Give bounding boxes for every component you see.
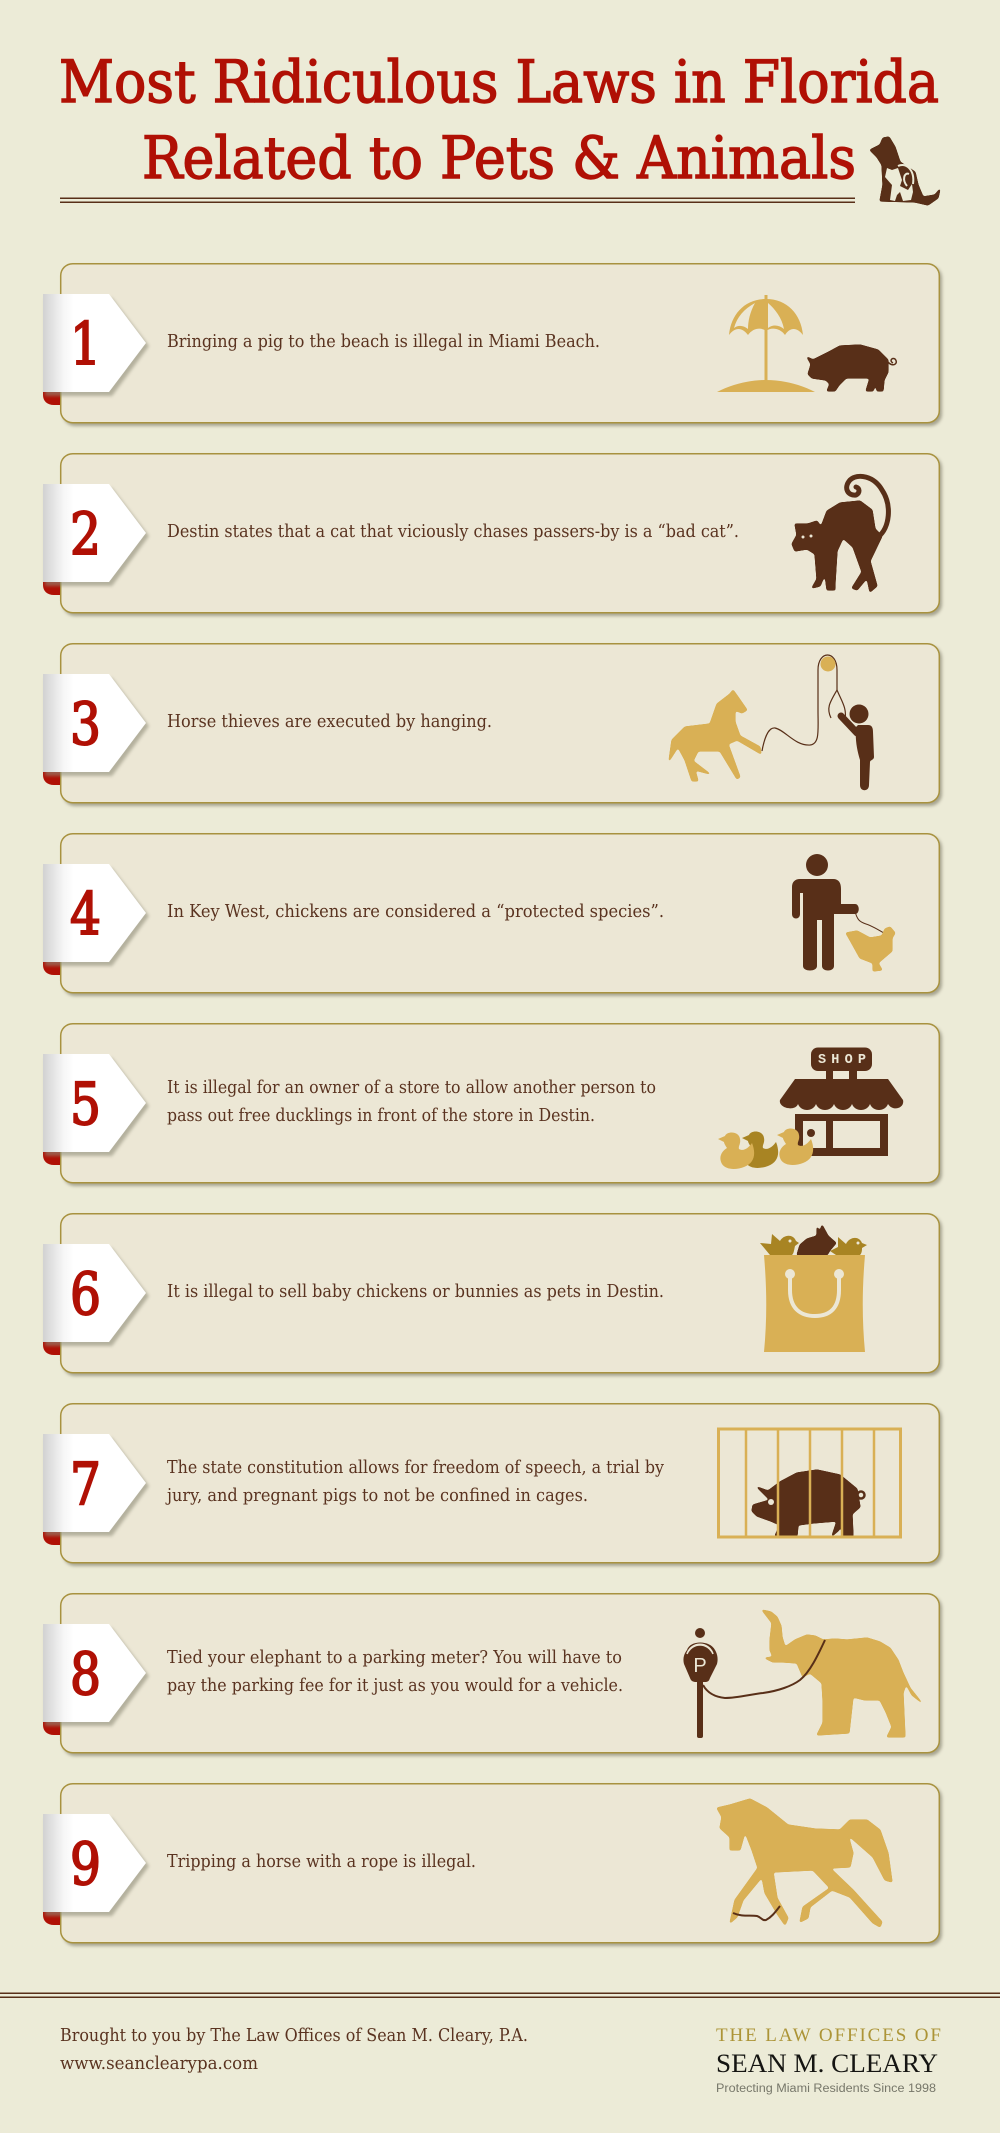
- icon: pig in a cage: [718, 1429, 900, 1537]
- panel 6: chickens and bunnies: [43, 1214, 942, 1376]
- text 1: Bringing a pig to the beach is illegal in Miami Beach.: [167, 331, 600, 352]
- text 6: It is illegal to sell baby chickens or bunnies as pets in Destin.: [167, 1281, 664, 1302]
- text 8: [167, 1647, 623, 1696]
- logo: law offices: THE LAW OFFICES OF: [716, 2025, 941, 2046]
- text 7: The state constitution allows for freedom of speech, a trial by: [167, 1457, 665, 1478]
- panel 4: Key West chickens: [43, 834, 942, 996]
- icon: man walking chicken: [792, 854, 895, 971]
- panel 5: free ducklings: [43, 1024, 942, 1186]
- number 1: 1: [70, 310, 101, 378]
- panel 8: elephant at a parking meter: [43, 1594, 942, 1756]
- number 8: 8: [70, 1640, 101, 1708]
- number 9: 9: [70, 1830, 101, 1898]
- panel 2: bad cat: [43, 454, 942, 616]
- text 9: Tripping a horse with a rope is illegal.: [167, 1851, 476, 1872]
- icon: elephant and parking meter: [683, 1610, 922, 1738]
- text 5: It is illegal for an owner of a store to allow another person to: [167, 1077, 656, 1098]
- title: Most Ridiculous Laws in Florida: [59, 48, 939, 116]
- icon: shop and ducks: SHOP: [818, 1053, 866, 1068]
- text 5: [167, 1077, 656, 1126]
- number 3: 3: [70, 690, 101, 758]
- panel 3: horse thieves: [43, 644, 942, 806]
- logo: law offices: SEAN M. CLEARY: [716, 2049, 938, 2078]
- footer credit: Brought to you by The Law Offices of Sean M. Cleary, P.A.: [60, 2025, 528, 2046]
- panel 7: pregnant pigs: [43, 1404, 942, 1566]
- text 7: [165, 1457, 665, 1506]
- icon: shopping bag with animals: [760, 1225, 867, 1352]
- icon: elephant and parking meter: P: [693, 1655, 707, 1677]
- icon: umbrella and pig: [717, 295, 896, 392]
- logo: law offices: [716, 2025, 941, 2095]
- number 6: 6: [70, 1260, 101, 1328]
- text 7: jury, and pregnant pigs to not be confined in cages.: [165, 1485, 588, 1506]
- icon: shop and ducks: [718, 1048, 903, 1169]
- icon: angry cat: [792, 476, 888, 592]
- panel 1: pig on the beach: [43, 264, 942, 426]
- number 5: 5: [70, 1070, 101, 1138]
- panel 9: tripping a horse: [43, 1784, 942, 1946]
- number 4: 4: [70, 880, 101, 948]
- icon: horse with rope: [717, 1799, 892, 1927]
- text 2: Destin states that a cat that viciously chases passers-by is a “bad cat”.: [167, 521, 739, 542]
- number 7: 7: [70, 1450, 101, 1518]
- number 2: 2: [70, 500, 101, 568]
- title: Related to Pets & Animals: [142, 124, 856, 192]
- text 8: Tied your elephant to a parking meter? You will have to: [167, 1647, 622, 1668]
- logo: law offices: Protecting Miami Residents Since 1998: [716, 2083, 936, 2095]
- text 5: pass out free ducklings in front of the store in Destin.: [167, 1105, 595, 1126]
- icon: dog and cat: [870, 137, 940, 205]
- text 3: Horse thieves are executed by hanging.: [167, 711, 492, 732]
- footer rules: [0, 1992, 1000, 1998]
- footer credit: www.seanclearypa.com: [60, 2053, 258, 2074]
- title: [59, 48, 939, 203]
- text 4: In Key West, chickens are considered a “protected species”.: [167, 901, 664, 922]
- footer credit: [60, 2025, 528, 2074]
- text 8: pay the parking fee for it just as you would for a vehicle.: [167, 1675, 623, 1696]
- icon: horse, rope and man: [669, 655, 874, 790]
